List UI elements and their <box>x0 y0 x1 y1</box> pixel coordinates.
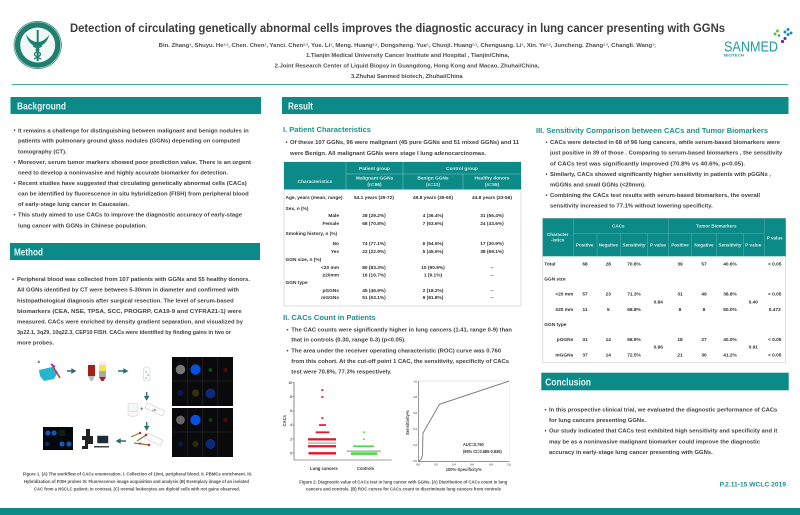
text block: background bullets: Moreover, serum tumor markers showed poor prediction value. There is an urgent <box>18 160 251 166</box>
authors and affiliations: , Xin. Ye <box>523 43 546 49</box>
text block: background bullets: It remains a challenge for distinguishing between malignant and benign nodules in <box>18 128 249 134</box>
icon: enriched cell tube <box>144 367 150 381</box>
text block: background bullets: • <box>14 128 16 134</box>
table: patient characteristics: 28 (29.2%) <box>362 213 386 219</box>
text block: sensitivity findings: • <box>546 172 548 178</box>
icon: blood collection from arm <box>39 364 60 381</box>
table: patient characteristics: -- <box>490 266 494 271</box>
chart: ROC curve: 0.0 <box>416 462 420 466</box>
poster reference: P.2.11-15 WCLC 2019 <box>720 481 786 488</box>
table: CACs vs tumor biomarkers: P value <box>650 243 666 248</box>
table: patient characteristics: Healthy donors <box>475 176 510 182</box>
authors and affiliations: , Dongsheng. Yue <box>377 43 427 49</box>
text block: CACs count findings <box>286 327 512 376</box>
section heading: sensitivity comparison: III. Sensitivity Comparison between CACs and Tumor Biomarkers <box>536 126 768 135</box>
authors and affiliations: 2,3 <box>546 42 551 46</box>
caption: figure 1: CAC from a NSCLC patient; In contrast, (C) normal leukocytes are diploid cells with not gains observed. <box>34 487 240 492</box>
table: CACs vs tumor biomarkers: CACs <box>612 224 625 229</box>
chart: CACs distribution scatter: 2 <box>290 437 292 441</box>
table: CACs vs tumor biomarkers: 31 <box>582 337 588 343</box>
heading: method <box>10 243 260 260</box>
table: patient characteristics: 4 (36.4%) <box>423 213 444 219</box>
authors and affiliations: , Shuyu. He <box>191 43 224 49</box>
table: CACs vs tumor biomarkers: 68.8% <box>627 307 642 313</box>
panel: background <box>10 97 261 230</box>
chart: ROC curve: 0.2 <box>434 462 438 466</box>
table: CACs vs tumor biomarkers: 31 <box>677 292 683 298</box>
chart: ROC curve: 0.6 <box>470 462 474 466</box>
chart: CACs distribution scatter: 6 <box>290 409 292 413</box>
figure 1: CACs workflow diagram <box>38 357 233 457</box>
table: patient characteristics: 22 (22.9%) <box>362 249 386 255</box>
table: patient characteristics: 44.8 years (23-56) <box>472 195 512 201</box>
table: CACs vs tumor biomarkers: 30 <box>701 352 707 358</box>
table: patient characteristics: Sex, n (%) <box>286 206 309 212</box>
table: patient characteristics: 10 (90.9%) <box>421 265 445 271</box>
table: CACs vs tumor biomarkers: GGN type <box>544 322 567 328</box>
table: patient characteristics: 7 (63.6%) <box>423 221 444 227</box>
text block: method description: Peripheral blood was collected from 107 patients with GGNs and 55 healthy donors. <box>17 277 250 283</box>
text block: conclusion bullets: may be as a noninvasive malignant biomarker could improve the diagnostic <box>549 439 761 445</box>
icon: microscope and monitor <box>82 429 109 449</box>
heading: background: Background <box>17 100 66 112</box>
text block: method description <box>12 277 250 347</box>
table: CACs vs tumor biomarkers: 27 <box>701 337 707 343</box>
authors and affiliations: 2,3 <box>603 42 608 46</box>
table: patient characteristics: 68 (70.8%) <box>362 221 386 227</box>
text block: patient summary: were Benign. All malignant GGNs were stage I lung adenocarcinomas. <box>289 151 486 157</box>
panel: conclusion <box>541 373 789 456</box>
icon: FISH probes on slide <box>131 432 163 446</box>
table: CACs vs tumor biomarkers: 57 <box>582 292 588 298</box>
table: patient characteristics: pGGNs <box>322 288 339 294</box>
table: CACs vs tumor biomarkers: 37 <box>582 352 588 358</box>
chart: CACs distribution scatter <box>282 381 392 471</box>
text block: background bullets: This study aimed to use CACs to improve the diagnostic accuracy of early-stage <box>18 213 243 219</box>
table: patient characteristics: Smoking history, n (%) <box>286 231 338 237</box>
icon: Sanmed Biotech logo: BIOTECH <box>724 54 745 58</box>
table: patient characteristics: (n=11) <box>426 182 440 188</box>
table: patient characteristics: Benign GGNs <box>417 176 449 182</box>
table: CACs vs tumor biomarkers: P value <box>745 243 762 248</box>
authors and affiliations <box>159 42 656 80</box>
heading: background <box>10 97 261 114</box>
title: Detection of circulating genetically abnormal cells improves the diagnostic accuracy in lung cancer presenting with GGNs <box>70 21 725 35</box>
text block: background bullets: of early-stage lung cancer in Caucasian. <box>18 202 129 208</box>
text block: background bullets: tomography (CT). <box>18 150 67 156</box>
authors and affiliations: 3.Zhuhai Sanmed biotech, Zhuhai/China <box>351 74 463 80</box>
authors and affiliations: 1 <box>652 42 654 46</box>
caption: figure 2: Figure 2. Diagnostic value of CACs test in lung cancer with GGNs. (A) Distribution of CACs count in lung <box>299 479 508 484</box>
authors and affiliations: Bin. Zhang <box>159 43 186 49</box>
table: patient characteristics: Age, years (mean, range) <box>286 195 343 201</box>
text block: CACs count findings: from this cohort. At the cut-off point 1 CAC, the sensitivity, specificity of CACs <box>291 359 509 365</box>
text block: CACs count findings: • <box>286 327 289 333</box>
chart: ROC curve: Sensitivity% <box>405 410 410 435</box>
table: CACs vs tumor biomarkers: Tumor Biomarkers <box>696 224 737 229</box>
table: patient characteristics: GGN type <box>286 280 308 286</box>
table: CACs vs tumor biomarkers: 0.40 <box>749 300 758 306</box>
icon: glass slide <box>145 403 165 416</box>
table: CACs vs tumor biomarkers: 21 <box>677 352 683 358</box>
table: patient characteristics: 16 (16.7%) <box>362 272 386 278</box>
table: CACs vs tumor biomarkers: 68.9% <box>627 337 642 343</box>
table: CACs vs tumor biomarkers: 23 <box>606 292 611 298</box>
caption: figure 2 <box>299 479 508 492</box>
text block: conclusion bullets <box>544 407 777 456</box>
table: patient characteristics: 80 (83.3%) <box>362 265 386 271</box>
table: patient characteristics: -- <box>490 289 494 294</box>
arrow: down to probes <box>145 422 148 430</box>
text block: method description: more probes. <box>17 341 54 347</box>
authors and affiliations: 1 <box>189 42 192 46</box>
table: CACs vs tumor biomarkers: mGGNs <box>555 352 574 358</box>
chart: ROC curve: 0.8 <box>413 395 418 399</box>
icon: density gradient tubes <box>88 362 106 381</box>
table: patient characteristics: Yes <box>331 249 339 255</box>
authors and affiliations: , Chuoji. Huang <box>429 43 472 49</box>
text block: background bullets: • <box>14 181 16 187</box>
table: CACs vs tumor biomarkers: Positive <box>671 243 689 248</box>
section heading: patient characteristics: I. Patient Characteristics <box>283 125 371 134</box>
authors and affiliations: 1 <box>330 42 332 46</box>
authors and affiliations: , Yanci. Chen <box>266 43 303 49</box>
chart: ROC curve: 0.4 <box>413 427 418 431</box>
arrow: step two to three <box>118 369 127 373</box>
text block: background bullets: • <box>14 160 16 166</box>
table: CACs vs tumor biomarkers: GGN size <box>544 277 566 283</box>
table: patient characteristics <box>284 162 521 306</box>
panel: method <box>10 243 260 492</box>
text block: CACs count findings: test were 70.8%, 77.3% respectively. <box>291 370 392 376</box>
table: CACs vs tumor biomarkers: 0.96 <box>654 345 663 351</box>
table: patient characteristics: 38 (69.1%) <box>480 249 504 255</box>
table: CACs vs tumor biomarkers: 8 <box>679 307 682 313</box>
chart: CACs distribution scatter: Lung cancers <box>310 466 338 471</box>
authors and affiliations: 1 <box>522 42 524 46</box>
chart: ROC curve: 1.0 <box>413 380 418 384</box>
table: patient characteristics: (n=96) <box>367 182 382 188</box>
chart: ROC curve <box>405 380 511 472</box>
caption: figure 1 <box>23 471 252 492</box>
image: leukocyte fluorescence panel C <box>172 408 233 457</box>
caption: figure 2: cancers and controls. (B) ROC curves for CACs count to discriminate lung cancers from controls <box>306 487 502 492</box>
icon: probe dish stack <box>128 403 138 416</box>
table: CACs vs tumor biomarkers: P value <box>767 235 783 240</box>
table: CACs vs tumor biomarkers: Sensitivity <box>623 243 646 248</box>
text block: sensitivity findings: just positive in 39 of those . Comparing to serum-based biomarkers , the sensitivity <box>549 151 783 157</box>
authors and affiliations: , Chen. Chen <box>228 43 264 49</box>
table: patient characteristics: 49.8 years (35-60) <box>413 195 453 201</box>
text block: CACs count findings: that in controls (0.30, range 0-3) (p<0.05). <box>291 338 406 344</box>
table: CACs vs tumor biomarkers: < 0.05 <box>768 337 782 343</box>
authors and affiliations: ; <box>654 43 656 49</box>
text block: conclusion bullets: Our study indicated that CACs test exhibited high sensitivity and specificity and it <box>549 429 777 435</box>
authors and affiliations: , Meng. Huang <box>332 43 373 49</box>
table: CACs vs tumor biomarkers: 41.2% <box>723 352 738 358</box>
heading: result <box>282 97 788 114</box>
table: patient characteristics: Control group <box>446 166 478 172</box>
table: CACs vs tumor biomarkers: 0.91 <box>749 345 758 351</box>
authors and affiliations: 1 <box>264 42 267 46</box>
text block: sensitivity findings: Similarly, CACs showed significantly higher sensitivity in patients with pGGNs , <box>550 172 771 178</box>
text block: patient summary: Of these 107 GGNs, 96 were malignant (45 pure GGNs and 51 mixed GGNs) and 11 <box>290 140 520 146</box>
chart: CACs distribution scatter: 8 <box>290 395 292 399</box>
table: patient characteristics: Characteristics <box>298 179 333 185</box>
table: patient characteristics: 45 (46.9%) <box>362 288 386 294</box>
table: CACs vs tumor biomarkers: 18 <box>677 337 683 343</box>
table: CACs vs tumor biomarkers: 14 <box>606 352 611 358</box>
table: CACs vs tumor biomarkers: 5 <box>607 307 610 313</box>
chart: CACs distribution scatter: CACs <box>282 414 287 426</box>
table: CACs vs tumor biomarkers <box>543 218 786 363</box>
table: patient characteristics: 5 (45.5%) <box>423 249 444 255</box>
text block: background bullets: can be identified by fluorescence in situ hybridization (FISH) from peripheral blood <box>18 192 249 198</box>
table: CACs vs tumor biomarkers: Total <box>544 262 555 268</box>
table: CACs vs tumor biomarkers: 39 <box>677 262 683 268</box>
text block: method description: histopathological diagnosis after surgical resection. The level of serum-based <box>17 299 234 305</box>
text block: method description: All GGNs identified by CT were between 5-30mm in diameter and confirmed with <box>17 288 239 294</box>
chart: ROC curve: 0.8 <box>489 462 493 466</box>
text block: sensitivity findings: • <box>546 140 548 146</box>
text block: method description: • <box>12 277 14 283</box>
table: patient characteristics: 1 (9.1%) <box>424 272 442 278</box>
heading: method: Method <box>14 246 43 258</box>
table: patient characteristics: ≥20mm <box>322 272 339 278</box>
table: CACs vs tumor biomarkers: ≥20 mm <box>555 307 573 313</box>
text block: conclusion bullets: for lung cancers presenting GGNs. <box>549 418 646 424</box>
table: patient characteristics: Malignant GGNs <box>356 176 393 182</box>
chart: CACs distribution scatter: 0 <box>290 451 292 455</box>
heading: conclusion <box>541 373 789 390</box>
chart: CACs distribution scatter: 4 <box>290 423 292 427</box>
table: CACs vs tumor biomarkers: 0.84 <box>654 300 663 306</box>
table: patient characteristics: 6 (54.5%) <box>423 241 444 247</box>
authors and affiliations: 2,3 <box>223 42 229 46</box>
table: patient characteristics: 54.1 years (29-72) <box>354 195 394 201</box>
table: CACs vs tumor biomarkers: 40.0% <box>723 337 738 343</box>
text block: conclusion bullets: accuracy in early-stage lung cancer presenting with GGNs. <box>549 450 713 456</box>
caption: figure 1: Figure 1. (A) The workflow of CACs enumeration. I. Collection of 10mL peripheral blood. II. PBMCs enrichment. III. <box>23 471 252 476</box>
table: patient characteristics: 17 (30.9%) <box>480 241 504 247</box>
authors and affiliations: 1 <box>427 42 429 46</box>
caption: figure 1: Hybridization of FISH probes IV. Fluorescence image acquisition and analysis (B) Exemplary image of an isolated <box>24 479 249 484</box>
table: CACs vs tumor biomarkers: 57 <box>701 262 707 268</box>
text block: method description: measured. CACs were enriched by density gradient separation, and visualized by <box>17 320 244 326</box>
table: patient characteristics: Female <box>322 221 339 227</box>
table: patient characteristics: Male <box>328 213 339 219</box>
chart: CACs distribution scatter: Controls <box>357 466 374 471</box>
text block: background bullets <box>14 128 251 230</box>
table: CACs vs tumor biomarkers: 0.473 <box>769 307 781 313</box>
text block: CACs count findings: The CAC counts were significantly higher in lung cancers (1.41, range 0-9) than <box>291 327 512 333</box>
table: CACs vs tumor biomarkers: 8 <box>703 307 706 313</box>
chart: ROC curve: AUC=0.760 <box>463 442 484 447</box>
chart: ROC curve: 0.4 <box>452 462 456 466</box>
table: patient characteristics: 51 (53.1%) <box>362 295 386 301</box>
icon: Sanmed Biotech logo: SANMED <box>724 38 778 56</box>
table: patient characteristics: <20 mm <box>321 265 339 271</box>
table: CACs vs tumor biomarkers: 49 <box>701 292 707 298</box>
chart: ROC curve: 0.6 <box>413 411 418 415</box>
text block: CACs count findings: The area under the receiver operating characteristic (ROC) curve was 0.760 <box>291 348 501 354</box>
text block: sensitivity findings: sensitivity increased to 77.1% without lowering specificity. <box>550 204 713 210</box>
text block: CACs count findings: • <box>286 348 289 354</box>
text block: sensitivity findings: • <box>546 193 548 199</box>
text block: background bullets: • <box>14 213 16 219</box>
authors and affiliations: , Changli. Wang <box>608 43 652 49</box>
table: patient characteristics: 2 (18.2%) <box>423 288 444 294</box>
table: CACs vs tumor biomarkers: Sensitivity <box>719 243 742 248</box>
table: CACs vs tumor biomarkers: 70.8% <box>627 262 642 268</box>
text block: background bullets: Recent studies have suggested that circulating genetically abnormal cells (CACs) <box>18 181 247 187</box>
table: CACs vs tumor biomarkers: Negative <box>599 243 618 248</box>
chart: ROC curve: 0.2 <box>413 443 418 447</box>
text block: conclusion bullets: • <box>544 429 547 435</box>
authors and affiliations: , Chenguang. Li <box>477 43 522 49</box>
heading: conclusion: Conclusion <box>545 376 591 388</box>
text block: conclusion bullets: In this prospective clinical trial, we evaluated the diagnostic performance of CACs <box>549 407 777 413</box>
authors and affiliations: 2,3 <box>303 42 308 46</box>
table: CACs vs tumor biomarkers: 14 <box>606 337 611 343</box>
icon: glass slide: +S <box>152 408 156 412</box>
text block: patient summary: • <box>286 140 288 146</box>
table: CACs vs tumor biomarkers: 38.8% <box>723 292 738 298</box>
authors and affiliations: 2,3 <box>472 42 477 46</box>
chart: ROC curve: 100%-Specificity% <box>446 467 482 472</box>
text block: conclusion bullets: • <box>544 407 547 413</box>
figure 1: CACs workflow diagram: A <box>38 360 40 364</box>
chart: ROC curve: 0.0 <box>413 459 418 463</box>
text block: method description: 3p22.1, 3q29, 10q22.3, CEP10 FISH. CACs were identified by finding gains in two or <box>17 330 232 336</box>
text block: sensitivity findings: CACs were detected in 68 of 96 lung cancers, while serum-based biomarkers were <box>550 140 781 146</box>
table: CACs vs tumor biomarkers: < 0.05 <box>768 262 782 268</box>
table: patient characteristics: -- <box>490 274 494 278</box>
table: CACs vs tumor biomarkers: Negative <box>694 243 714 248</box>
table: patient characteristics: 9 (81.8%) <box>423 295 444 301</box>
table: CACs vs tumor biomarkers: < 0.05 <box>768 292 782 298</box>
image: cell scan grid <box>43 427 73 450</box>
table: CACs vs tumor biomarkers: 68 <box>582 262 588 268</box>
heading: result: Result <box>288 100 313 112</box>
table: patient characteristics: mGGNs <box>321 295 339 301</box>
arrow: to imaging <box>117 439 126 443</box>
chart: CACs distribution scatter: 10 <box>288 381 292 385</box>
text block: sensitivity findings: Combining the CACs test results with serum-based biomarkers, the overall <box>550 193 760 199</box>
icon: Sanmed Biotech logo <box>724 28 792 58</box>
text block: sensitivity findings: of CACs test was significantly improved (70.8% vs 40.6%, p<0.05). <box>550 161 745 167</box>
table: CACs vs tumor biomarkers: Positive <box>576 243 594 248</box>
text block: background bullets: patients with pulmonary ground glass nodules (GGNs) depending on computed <box>18 138 240 144</box>
chart: ROC curve: 1.0 <box>507 462 511 466</box>
text block: background bullets: need to develop a noninvasive and highly accurate biomarker for detection. <box>18 171 228 177</box>
table: CACs vs tumor biomarkers: < 0.05 <box>768 352 782 358</box>
text block: method description: biomarkers (CEA, NSE, TPSA, SCC, PROGRP, CA19-9 and CYFRA21-1) were <box>17 309 243 315</box>
table: CACs vs tumor biomarkers: 28 <box>606 262 611 268</box>
image: CAC fluorescence panel B <box>172 357 233 406</box>
table: patient characteristics: 31 (56.4%) <box>480 213 504 219</box>
table: patient characteristics: 74 (77.1%) <box>362 241 386 247</box>
table: CACs vs tumor biomarkers: 40.6% <box>723 262 738 268</box>
arrow: down to hybridization <box>145 392 148 400</box>
table: patient characteristics: Patient group <box>359 166 390 172</box>
section heading: CACs count: II. CACs Count in Patients <box>283 313 376 322</box>
table: CACs vs tumor biomarkers: 50.0% <box>723 307 738 313</box>
authors and affiliations: , Yue. Li <box>308 43 331 49</box>
authors and affiliations: 2.Joint Research Center of Liquid Biopsy in Guangdong, Hong Kong and Macao, Zhuhai/China, <box>275 64 540 70</box>
authors and affiliations: 1.Tianjin Medical University Cancer Institute and Hospital , Tianjin/China, <box>306 53 510 59</box>
table: CACs vs tumor biomarkers: -istics <box>551 238 565 243</box>
chart: ROC curve: (95% CI=0.685-0.836) <box>463 449 502 454</box>
table: CACs vs tumor biomarkers: 72.5% <box>627 352 642 358</box>
plus sign: + <box>140 407 144 413</box>
text block: sensitivity findings <box>546 140 783 210</box>
arrow: step one to two <box>67 369 75 373</box>
authors and affiliations: , Juncheng. Zhang <box>551 43 603 49</box>
icon: university seal logo <box>14 21 62 69</box>
table: patient characteristics: (n=55) <box>485 182 500 188</box>
authors and affiliations: 2,3 <box>373 42 378 46</box>
table: CACs vs tumor biomarkers: 11 <box>582 307 588 313</box>
panel: result <box>282 97 788 492</box>
text block: sensitivity findings: mGGNs and small GGNs (<20mm). <box>550 182 646 188</box>
table: CACs vs tumor biomarkers: 71.3% <box>627 292 642 298</box>
table: patient characteristics: -- <box>490 296 494 301</box>
table: CACs vs tumor biomarkers: Character <box>547 232 569 237</box>
table: CACs vs tumor biomarkers: pGGNs <box>557 337 574 343</box>
table: patient characteristics: GGN size, n (%) <box>286 257 322 263</box>
table: patient characteristics: 24 (43.6%) <box>480 221 504 227</box>
table: CACs vs tumor biomarkers: <20 mm <box>555 292 573 298</box>
table: patient characteristics: No <box>333 241 339 247</box>
text block: background bullets: lung cancer with GGNs in Chinese population. <box>18 224 147 230</box>
text block: patient summary <box>286 140 520 157</box>
